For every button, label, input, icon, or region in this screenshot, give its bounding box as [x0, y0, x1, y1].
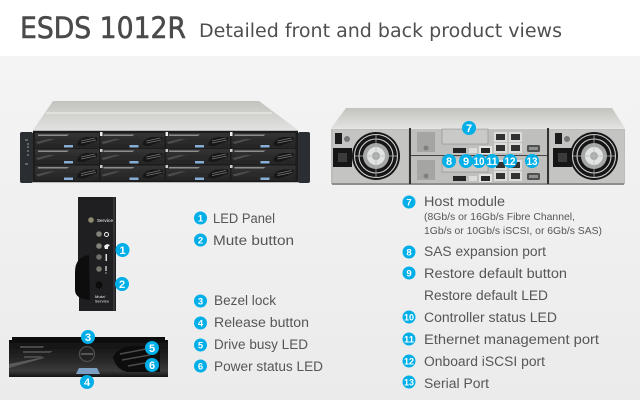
legend: back panel items: 12	[404, 356, 414, 368]
callout badges on images: 5	[149, 343, 155, 355]
legend: bezel items: Drive busy LED	[214, 337, 308, 352]
back product view	[331, 108, 625, 185]
legend: back panel items: 9	[406, 268, 412, 280]
legend: LED panel items: 2	[198, 236, 203, 246]
legend: bezel items: 5	[198, 340, 204, 352]
title	[20, 11, 562, 45]
LED panel side view	[75, 197, 116, 311]
legend: LED panel items	[194, 211, 294, 248]
callout badges on images: 3	[85, 332, 91, 344]
callout badges on images	[80, 121, 539, 389]
legend: LED panel items: LED Panel	[213, 211, 275, 226]
bezel handle	[75, 255, 90, 300]
callout badges on images: 9	[463, 156, 469, 168]
legend: back panel items: Serial Port	[424, 376, 489, 391]
legend: back panel items: 7	[406, 198, 412, 208]
callout badges on images: 12	[504, 156, 516, 168]
LEDs and icons: Service	[95, 298, 110, 304]
callout badges on images: 10	[474, 156, 484, 168]
legend: back panel items: Restore default LED	[424, 288, 548, 303]
callout badges on images: 13	[526, 156, 538, 168]
legend: back panel items: Host module	[424, 194, 505, 209]
legend: back panel items: SAS expansion port	[424, 244, 546, 259]
legend: back panel items: 10	[404, 312, 414, 324]
legend: bezel items: 4	[198, 318, 204, 330]
drive tray bezel close-up	[9, 337, 168, 377]
legend: bezel items: Bezel lock	[214, 293, 276, 308]
power supply left	[333, 130, 408, 183]
legend: LED panel items: Mute button	[213, 233, 294, 248]
front product view	[20, 101, 310, 183]
legend: LED panel items: 1	[198, 214, 204, 224]
legend: bezel items: 3	[198, 296, 203, 308]
legend: bezel items: 6	[198, 362, 203, 372]
legend: back panel items: 11	[404, 334, 415, 346]
legend: bezel items	[194, 293, 323, 374]
legend: back panel items	[402, 194, 602, 391]
legend: bezel items: Power status LED	[214, 359, 323, 374]
LEDs and icons: Service	[97, 218, 114, 223]
legend: back panel items: Onboard iSCSI port	[424, 354, 545, 369]
LEDs and icons	[88, 217, 114, 304]
callout badges on images: 4	[84, 377, 91, 389]
callout badges on images: 2	[119, 279, 125, 291]
callout badges on images: 7	[466, 123, 472, 135]
controller modules	[409, 128, 549, 184]
legend: back panel items: Controller status LED	[424, 310, 557, 325]
power supply right	[550, 130, 624, 183]
LEDs and icons: Mute/	[95, 294, 106, 299]
legend: back panel items: (8Gb/s or 16Gb/s Fibre Channel,	[424, 211, 575, 223]
legend: back panel items: 1Gb/s or 10Gb/s iSCSI, or 6Gb/s SAS)	[424, 225, 602, 237]
right ear	[298, 132, 310, 183]
legend: back panel items: 13	[404, 378, 414, 388]
title: Detailed front and back product views	[199, 21, 562, 42]
left ear	[20, 132, 33, 183]
release button	[76, 368, 100, 374]
title: ESDS 1012R	[20, 11, 186, 45]
callout badges on images: 6	[149, 360, 155, 372]
legend: back panel items: 8	[406, 248, 412, 258]
legend: bezel items: Release button	[214, 315, 309, 330]
legend: back panel items: Restore default button	[424, 266, 567, 281]
callout badges on images: 1	[119, 245, 126, 257]
callout badges on images: 11	[486, 156, 498, 168]
callout badges on images: 8	[446, 156, 452, 168]
legend: back panel items: Ethernet management port	[424, 332, 599, 347]
